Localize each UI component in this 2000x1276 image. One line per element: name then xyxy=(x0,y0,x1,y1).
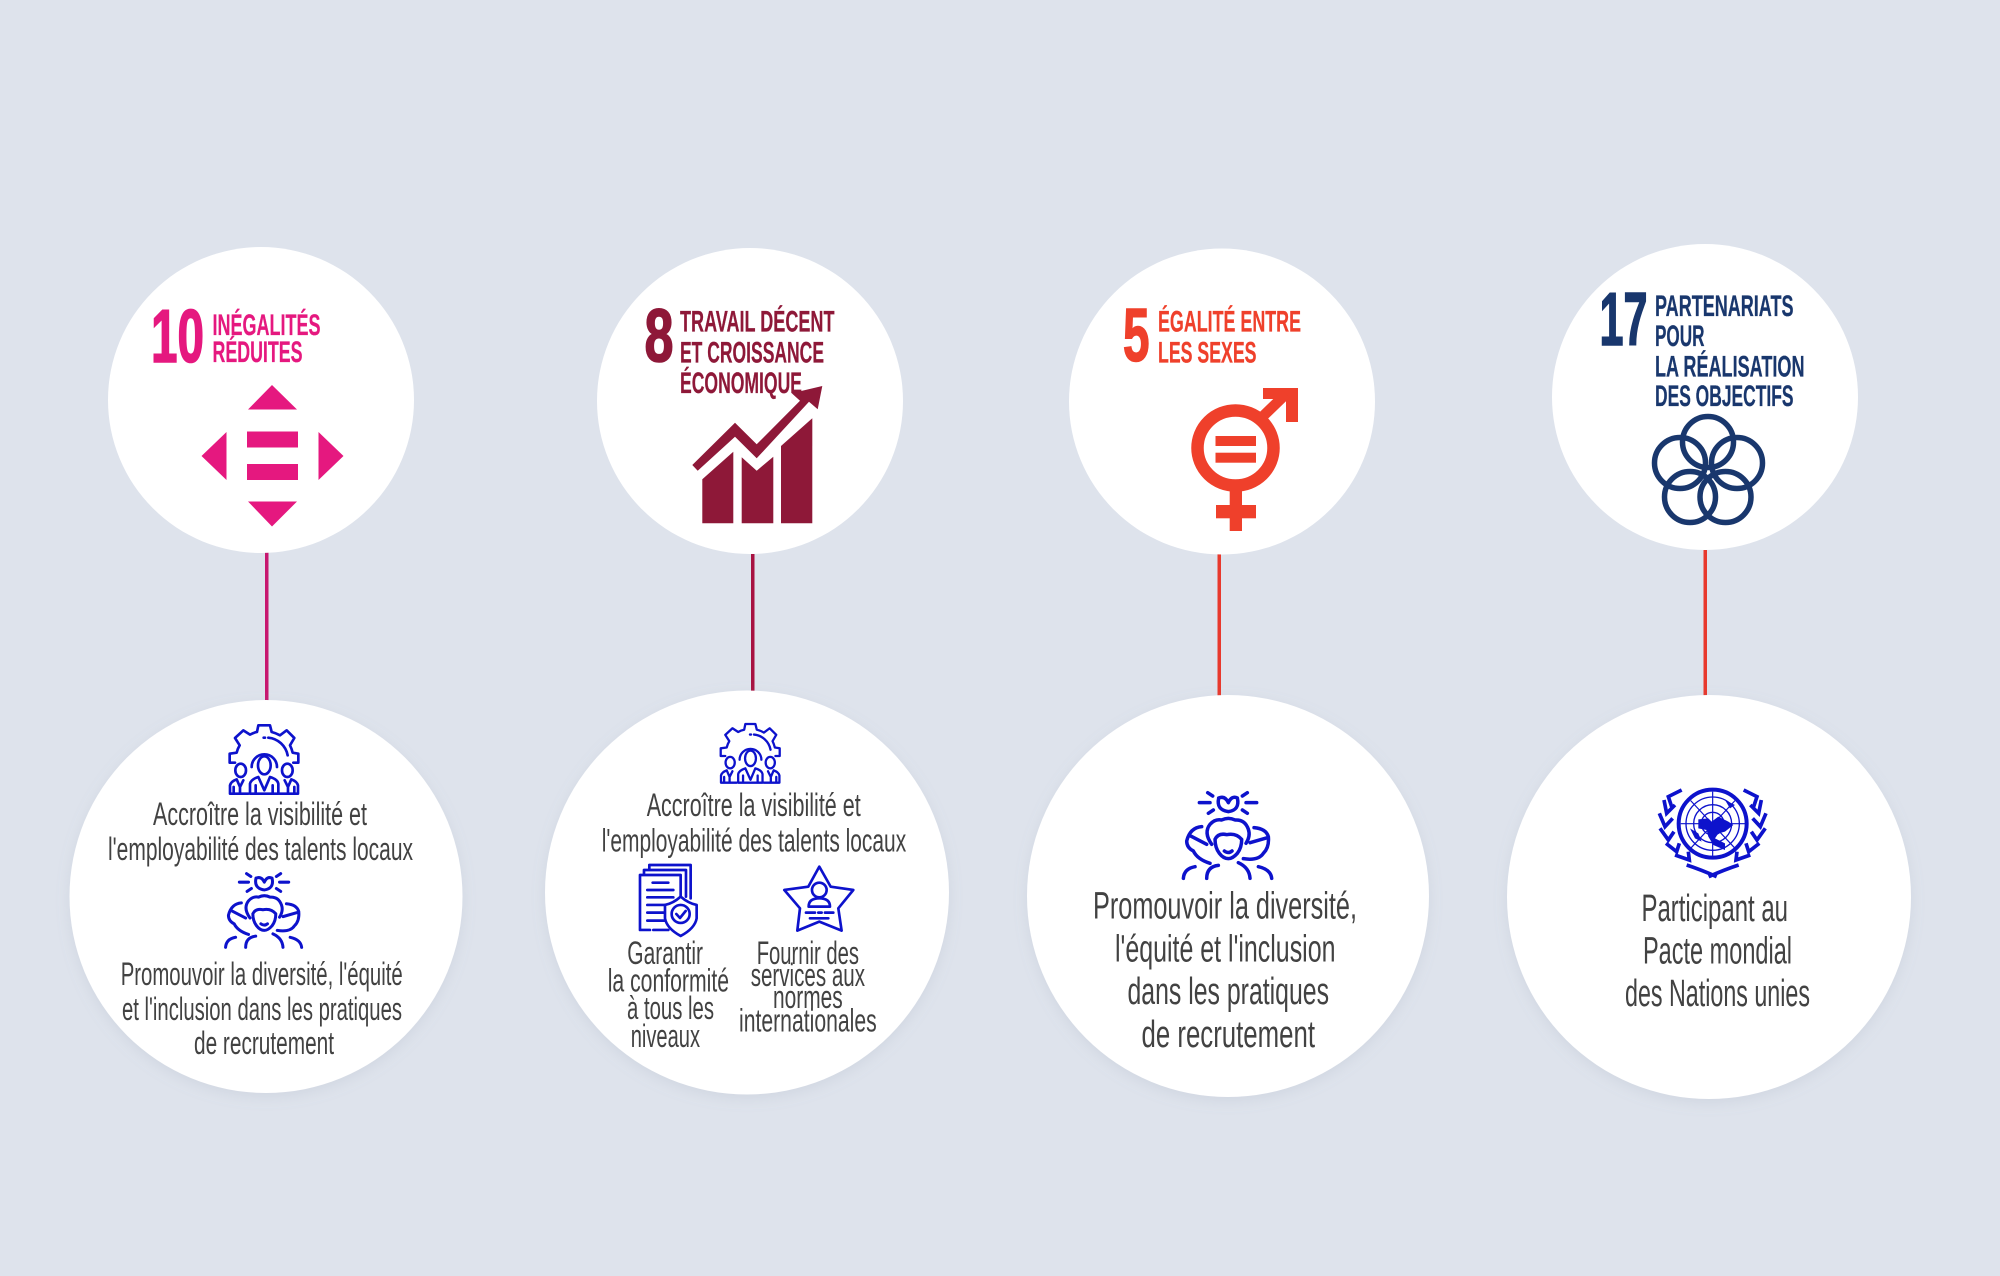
icon: reduced inequalities xyxy=(202,385,344,526)
panel: goal 8 badge xyxy=(597,248,903,554)
text: UN Global Compact xyxy=(1625,888,1810,1015)
text: compliance: niveaux xyxy=(631,1018,700,1054)
text: diversity xyxy=(1093,886,1357,1056)
text: visibility xyxy=(602,787,906,859)
goal number 5: 5 xyxy=(1123,293,1150,377)
text: international standards: services aux xyxy=(751,957,865,993)
text: UN Global Compact: des Nations unies xyxy=(1625,973,1810,1015)
icon: team and gear xyxy=(721,724,780,783)
goal title: ÉGALITÉ ENTRE xyxy=(1158,304,1301,338)
action circle xyxy=(1507,695,1911,1099)
badge circle xyxy=(1552,244,1858,550)
goal title xyxy=(1655,290,1804,413)
goal number 8: 8 xyxy=(644,294,674,378)
panel: goal 8 actions xyxy=(545,690,949,1094)
goal title: INÉGALITÉS xyxy=(212,308,320,342)
text: visibility xyxy=(108,796,413,867)
icon: partnership rings xyxy=(1654,416,1762,522)
icon: growth chart xyxy=(692,386,822,523)
text: diversity: Promouvoir la diversité, l'équité xyxy=(121,956,403,992)
connector line: goal 5 xyxy=(1218,554,1221,698)
action circle xyxy=(545,690,949,1094)
text: UN Global Compact: Pacte mondial xyxy=(1643,930,1792,972)
connector line: goal 17 xyxy=(1704,550,1707,698)
icon: diverse people xyxy=(226,874,302,947)
goal number 17: 17 xyxy=(1600,277,1648,361)
goal title: DES OBJECTIFS xyxy=(1655,380,1794,413)
goal title xyxy=(680,304,834,400)
icon: United Nations emblem xyxy=(1659,790,1766,877)
panel: goal 17 actions xyxy=(1507,695,1911,1099)
icon: team and gear xyxy=(230,725,298,794)
text: diversity: et l'inclusion dans les pratiques xyxy=(122,991,402,1027)
text: international standards: internationales xyxy=(739,1003,877,1039)
text: international standards xyxy=(739,935,877,1039)
goal title: RÉDUITES xyxy=(212,335,302,369)
text: diversity: l'équité et l'inclusion xyxy=(1115,928,1336,970)
icon: gender equality xyxy=(1198,388,1298,531)
badge circle xyxy=(1069,248,1375,554)
panel: goal 10 actions xyxy=(70,700,462,1093)
icon: star person xyxy=(784,867,853,931)
goal title: TRAVAIL DÉCENT xyxy=(680,304,834,338)
action circle xyxy=(1027,695,1429,1097)
text: international standards: normes xyxy=(773,979,843,1015)
text: diversity: de recrutement xyxy=(1142,1014,1315,1056)
text: compliance xyxy=(608,935,729,1054)
goal title: PARTENARIATS xyxy=(1655,290,1794,323)
badge circle xyxy=(597,248,903,554)
goal title xyxy=(212,308,320,369)
goal title xyxy=(1158,304,1301,370)
goal number 10: 10 xyxy=(151,294,204,378)
panel: goal 17 badge xyxy=(1552,244,1858,550)
text: compliance: à tous les xyxy=(627,990,714,1026)
text: visibility: Accroître la visibilité et xyxy=(153,796,367,832)
panel: goal 10 badge xyxy=(108,247,414,553)
action circle xyxy=(70,700,462,1093)
text: international standards: Fournir des xyxy=(757,935,859,971)
badge circle xyxy=(108,247,414,553)
text: visibility: l'employabilité des talents locaux xyxy=(108,831,413,867)
connector line: goal 8 xyxy=(751,554,754,694)
panel: goal 5 actions xyxy=(1027,695,1429,1097)
goal title: ÉCONOMIQUE xyxy=(680,366,802,400)
icon: compliance document xyxy=(640,865,697,936)
goal title: ET CROISSANCE xyxy=(680,336,824,370)
goal title: LA RÉALISATION xyxy=(1655,350,1804,384)
text: diversity xyxy=(121,956,403,1061)
panel: goal 5 badge xyxy=(1069,248,1375,554)
text: diversity: de recrutement xyxy=(194,1025,334,1061)
text: visibility: l'employabilité des talents locaux xyxy=(602,823,906,859)
icon: diverse people xyxy=(1183,793,1272,878)
connector line: goal 10 xyxy=(265,552,268,702)
text: visibility: Accroître la visibilité et xyxy=(647,787,861,823)
text: diversity: Promouvoir la diversité, xyxy=(1093,886,1357,928)
text: compliance: la conformité xyxy=(608,963,729,999)
goal title: POUR xyxy=(1655,320,1704,353)
text: UN Global Compact: Participant au xyxy=(1642,888,1788,930)
text: diversity: dans les pratiques xyxy=(1128,971,1329,1013)
text: compliance: Garantir xyxy=(627,935,703,971)
goal title: LES SEXES xyxy=(1158,336,1256,370)
